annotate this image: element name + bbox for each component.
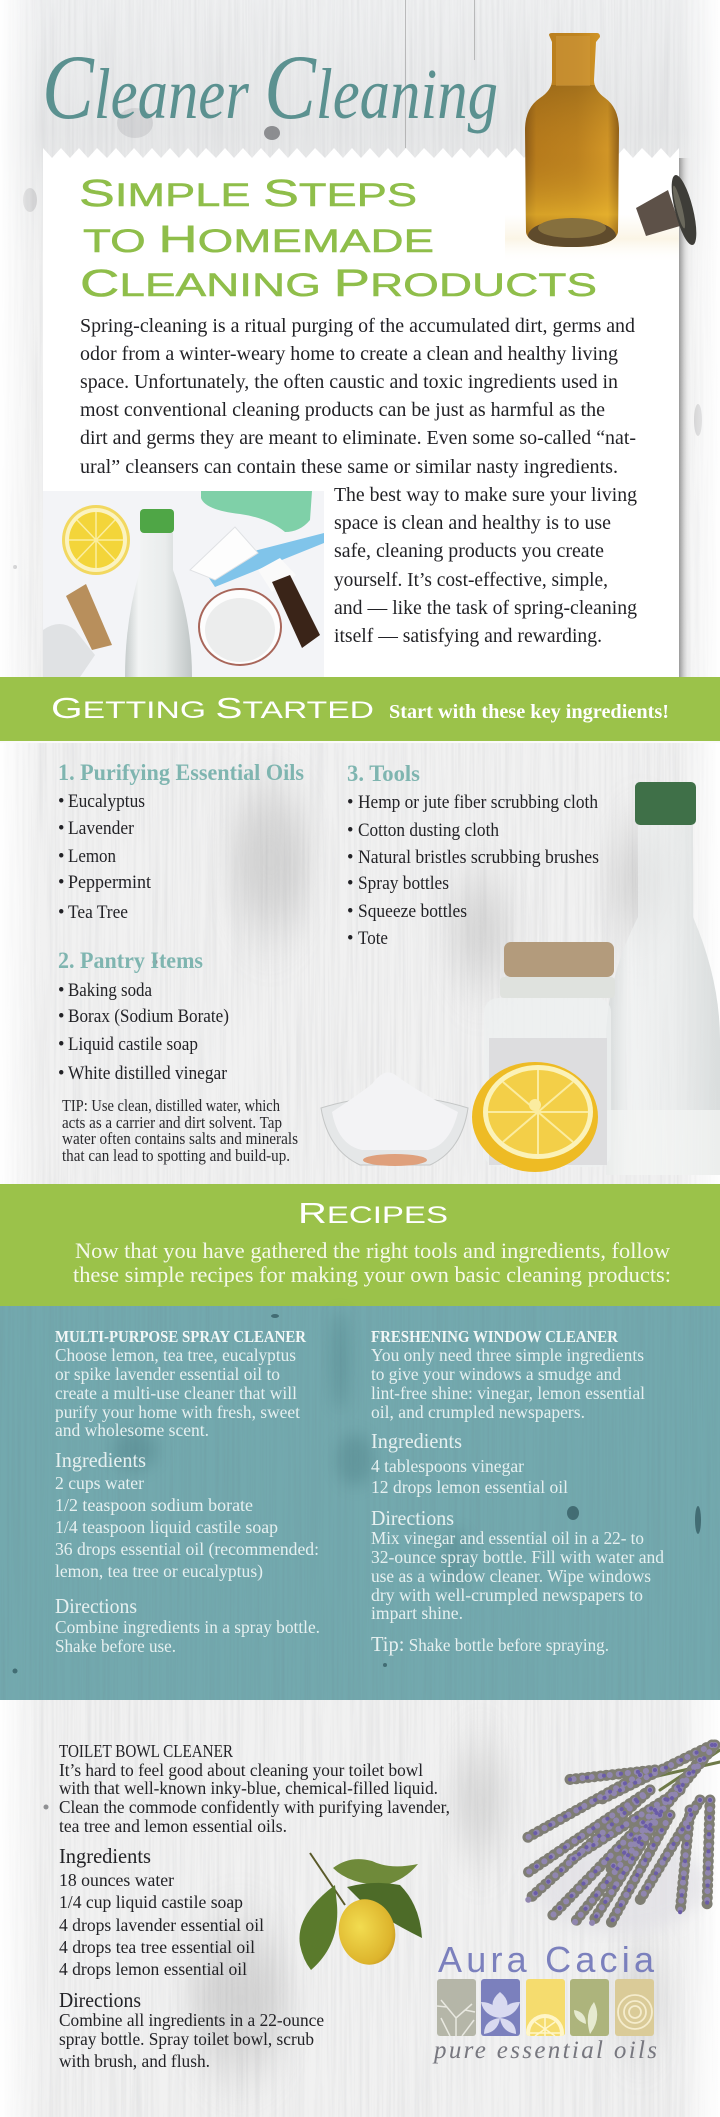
recipe: freshening window cleaner: dry with well-crumpled newspapers to <box>371 1585 643 1605</box>
recipe: toilet bowl cleaner: TOILET BOWL CLEANER <box>59 1741 233 1761</box>
recipe: toilet bowl cleaner: with brush, and flush. <box>59 2051 210 2071</box>
heading: recipes: R ECIPES <box>298 1198 448 1230</box>
recipe: freshening window cleaner: Tip: Shake bottle before spraying. <box>371 1632 609 1656</box>
heading: simple steps <box>79 173 597 305</box>
list: pantry items: • <box>58 1007 64 1027</box>
heading: getting started: G ETTING S TARTED <box>51 693 374 725</box>
list: essential oils: Lemon <box>68 847 116 867</box>
text: intro paragraph: Spring-cleaning is a ritual purging of the accumulated dirt, germs and <box>80 315 635 337</box>
text: recipes introduction: Now that you have gathered the right tools and ingredients, follow <box>75 1238 670 1263</box>
text: intro paragraph: odor from a winter-weary home to create a clean and healthy living <box>80 343 618 365</box>
text: second paragraph: space is clean and healthy is to use <box>334 512 611 534</box>
logo wordmark: Aura Cacia <box>438 1939 655 1980</box>
recipe: toilet bowl cleaner: with that well-known inky-blue, chemical-filled liquid. <box>59 1778 438 1798</box>
recipe: multi-purpose spray cleaner: create a multi-use cleaner that will <box>55 1383 297 1403</box>
heading: simple steps: TO H OMEMADE <box>83 219 434 261</box>
recipe: multi-purpose spray cleaner: Ingredients <box>55 1448 146 1472</box>
list: tools: Squeeze bottles <box>358 902 467 922</box>
list: tools: • <box>347 848 353 868</box>
list: pantry items <box>58 948 229 1084</box>
list: pantry items: Borax (Sodium Borate) <box>68 1007 229 1027</box>
text: second paragraph: The best way to make sure your living <box>334 484 637 506</box>
list: tools: • <box>347 929 353 949</box>
recipe: toilet bowl cleaner: spray bottle. Spray toilet bowl, scrub <box>59 2029 314 2049</box>
text: intro paragraph: ural” cleansers can contain these same or similar nasty ingredients. <box>80 456 618 478</box>
recipe: multi-purpose spray cleaner: Choose lemon, tea tree, eucalyptus <box>55 1345 296 1365</box>
list: tools: Spray bottles <box>358 874 449 894</box>
list: pantry items: Baking soda <box>68 981 152 1001</box>
list: tools: • <box>347 902 353 922</box>
recipe: multi-purpose spray cleaner: Shake before use. <box>55 1636 176 1656</box>
panel: ingredient lists <box>58 760 599 1165</box>
callout: water tip: that can lead to spotting and build-up. <box>62 1146 290 1165</box>
recipe: toilet bowl cleaner: Ingredients <box>59 1844 151 1868</box>
icon: lemon with leaves <box>299 1853 422 1971</box>
recipe: toilet bowl cleaner: 1/4 cup liquid castile soap <box>59 1892 243 1912</box>
recipe: multi-purpose spray cleaner: 2 cups water <box>55 1473 144 1493</box>
list: tools: Cotton dusting cloth <box>358 821 499 841</box>
logo tiles <box>437 1979 654 2036</box>
list: tools: Hemp or jute fiber scrubbing cloth <box>358 793 598 813</box>
recipe: toilet bowl cleaner: 4 drops tea tree essential oil <box>59 1937 255 1957</box>
recipe: freshening window cleaner: to give your windows a smudge and <box>371 1364 621 1384</box>
recipe: toilet bowl cleaner: It’s hard to feel good about cleaning your toilet bowl <box>59 1760 423 1780</box>
recipe: multi-purpose spray cleaner: 1/4 teaspoon liquid castile soap <box>55 1517 278 1537</box>
recipe: freshening window cleaner <box>371 1327 664 1656</box>
text: second paragraph: yourself. It’s cost-effective, simple, <box>334 569 608 591</box>
list: pantry items: • <box>58 1035 64 1055</box>
recipe: multi-purpose spray cleaner: Combine ingredients in a spray bottle. <box>55 1617 320 1637</box>
recipe: freshening window cleaner: Mix vinegar and essential oil in a 22- to <box>371 1528 644 1548</box>
text: recipes introduction <box>73 1238 671 1287</box>
text: intro paragraph <box>80 315 636 478</box>
list: tools <box>347 761 599 949</box>
banner: recipes <box>0 1184 720 1306</box>
icon: bottle stopper <box>636 173 701 247</box>
text: intro paragraph: dirt and germs they are meant to eliminate. Even some so-called “nat- <box>80 427 636 449</box>
list: essential oils: Eucalyptus <box>68 792 145 812</box>
recipe: toilet bowl cleaner: Clean the commode confidently with purifying lavender, <box>59 1797 450 1817</box>
list: essential oils: • <box>58 873 64 893</box>
recipe: multi-purpose spray cleaner: 36 drops essential oil (recommended: <box>55 1539 319 1559</box>
callout: water tip <box>62 1096 298 1165</box>
recipe: freshening window cleaner: impart shine. <box>371 1603 463 1623</box>
list: pantry items: • <box>58 1064 64 1084</box>
icon: amber bottle <box>525 33 619 253</box>
recipe: freshening window cleaner: 4 tablespoons vinegar <box>371 1456 524 1476</box>
list: pantry items: White distilled vinegar <box>68 1064 227 1084</box>
icon: lavender bunch <box>523 1745 720 1933</box>
text: intro paragraph: space. Unfortunately, the often caustic and toxic ingredients used in <box>80 371 618 393</box>
list: essential oils <box>58 760 304 923</box>
recipe: freshening window cleaner: lint-free shine: vinegar, lemon essential <box>371 1383 645 1403</box>
recipe: toilet bowl cleaner: 4 drops lavender essential oil <box>59 1915 264 1935</box>
list: essential oils: • <box>58 903 64 923</box>
recipe: freshening window cleaner: Ingredients <box>371 1429 462 1453</box>
logo tagline: pure essential oils <box>432 2037 657 2064</box>
list: pantry items: 2. Pantry Items <box>58 948 203 973</box>
logo: aura cacia <box>432 1939 657 2064</box>
photo: bottle, jar, lemon and baking soda <box>321 782 720 1175</box>
heading: simple steps: C LEANING P RODUCTS <box>80 263 597 305</box>
photo: cleaning supplies flat lay <box>43 491 324 677</box>
list: tools: • <box>347 821 353 841</box>
recipe: freshening window cleaner: use as a window cleaner. Wipe windows <box>371 1566 651 1586</box>
list: essential oils: 1. Purifying Essential Oils <box>58 760 304 785</box>
list: essential oils: • <box>58 847 64 867</box>
panel: intro paper <box>43 33 701 677</box>
recipe: toilet bowl cleaner: 18 ounces water <box>59 1870 174 1890</box>
list: tools: • <box>347 874 353 894</box>
list: pantry items: Liquid castile soap <box>68 1035 198 1055</box>
recipe: freshening window cleaner: 32-ounce spray bottle. Fill with water and <box>371 1547 664 1567</box>
recipe: freshening window cleaner: Directions <box>371 1506 454 1530</box>
callout: water tip: water often contains salts and minerals <box>62 1129 298 1148</box>
list: essential oils: Tea Tree <box>68 903 128 923</box>
recipe: freshening window cleaner: FRESHENING WINDOW CLEANER <box>371 1327 619 1346</box>
list: essential oils: Peppermint <box>68 873 152 893</box>
list: tools: 3. Tools <box>347 761 420 786</box>
list: tools: Natural bristles scrubbing brushes <box>358 848 599 868</box>
callout: water tip: TIP: Use clean, distilled water, which <box>62 1096 281 1115</box>
list: tools: Tote <box>358 929 388 949</box>
text: recipes introduction: these simple recipes for making your own basic cleaning products: <box>73 1262 671 1287</box>
recipe: multi-purpose spray cleaner <box>55 1327 320 1656</box>
recipe: toilet bowl cleaner: 4 drops lemon essential oil <box>59 1959 247 1979</box>
recipe: freshening window cleaner: oil, and crumpled newspapers. <box>371 1402 585 1422</box>
recipe: toilet bowl cleaner: Combine all ingredients in a 22-ounce <box>59 2010 324 2030</box>
recipe: multi-purpose spray cleaner: or spike lavender essential oil to <box>55 1364 280 1384</box>
callout: water tip: acts as a carrier and dirt solvent. Tap <box>62 1113 282 1132</box>
text: second paragraph: itself — satisfying and rewarding. <box>334 625 602 647</box>
list: essential oils: • <box>58 792 64 812</box>
heading: simple steps: S IMPLE S TEPS <box>79 173 417 215</box>
recipe: freshening window cleaner: You only need three simple ingredients <box>371 1345 644 1365</box>
recipe: toilet bowl cleaner: Directions <box>59 1988 141 2012</box>
recipe: multi-purpose spray cleaner: 1/2 teaspoon sodium borate <box>55 1495 253 1515</box>
recipe: multi-purpose spray cleaner: purify your home with fresh, sweet <box>55 1402 300 1422</box>
banner: getting started <box>0 677 720 743</box>
list: pantry items: • <box>58 981 64 1001</box>
recipe: toilet bowl cleaner: tea tree and lemon essential oils. <box>59 1816 287 1836</box>
list: tools: • <box>347 793 353 813</box>
list: essential oils: Lavender <box>68 819 134 839</box>
panel: teal recipes <box>0 1306 720 1700</box>
recipe: multi-purpose spray cleaner: lemon, tea tree or eucalyptus) <box>55 1561 263 1581</box>
subheading: key ingredients: Start with these key ingredients! <box>389 701 669 723</box>
text: second paragraph: and — like the task of spring-cleaning <box>334 597 637 619</box>
recipe: multi-purpose spray cleaner: Directions <box>55 1594 137 1618</box>
title: Cleaner Cleaning <box>42 36 498 138</box>
recipe: multi-purpose spray cleaner: MULTI-PURPOSE SPRAY CLEANER <box>55 1327 307 1346</box>
list: essential oils: • <box>58 819 64 839</box>
text: second paragraph: safe, cleaning products you create <box>334 540 604 562</box>
recipe: freshening window cleaner: 12 drops lemon essential oil <box>371 1477 568 1497</box>
text: second paragraph <box>334 484 637 647</box>
text: intro paragraph: most conventional cleaning products can be just as harmful as the <box>80 399 605 421</box>
recipe: multi-purpose spray cleaner: and wholesome scent. <box>55 1420 209 1440</box>
recipe: toilet bowl cleaner <box>59 1741 450 2071</box>
